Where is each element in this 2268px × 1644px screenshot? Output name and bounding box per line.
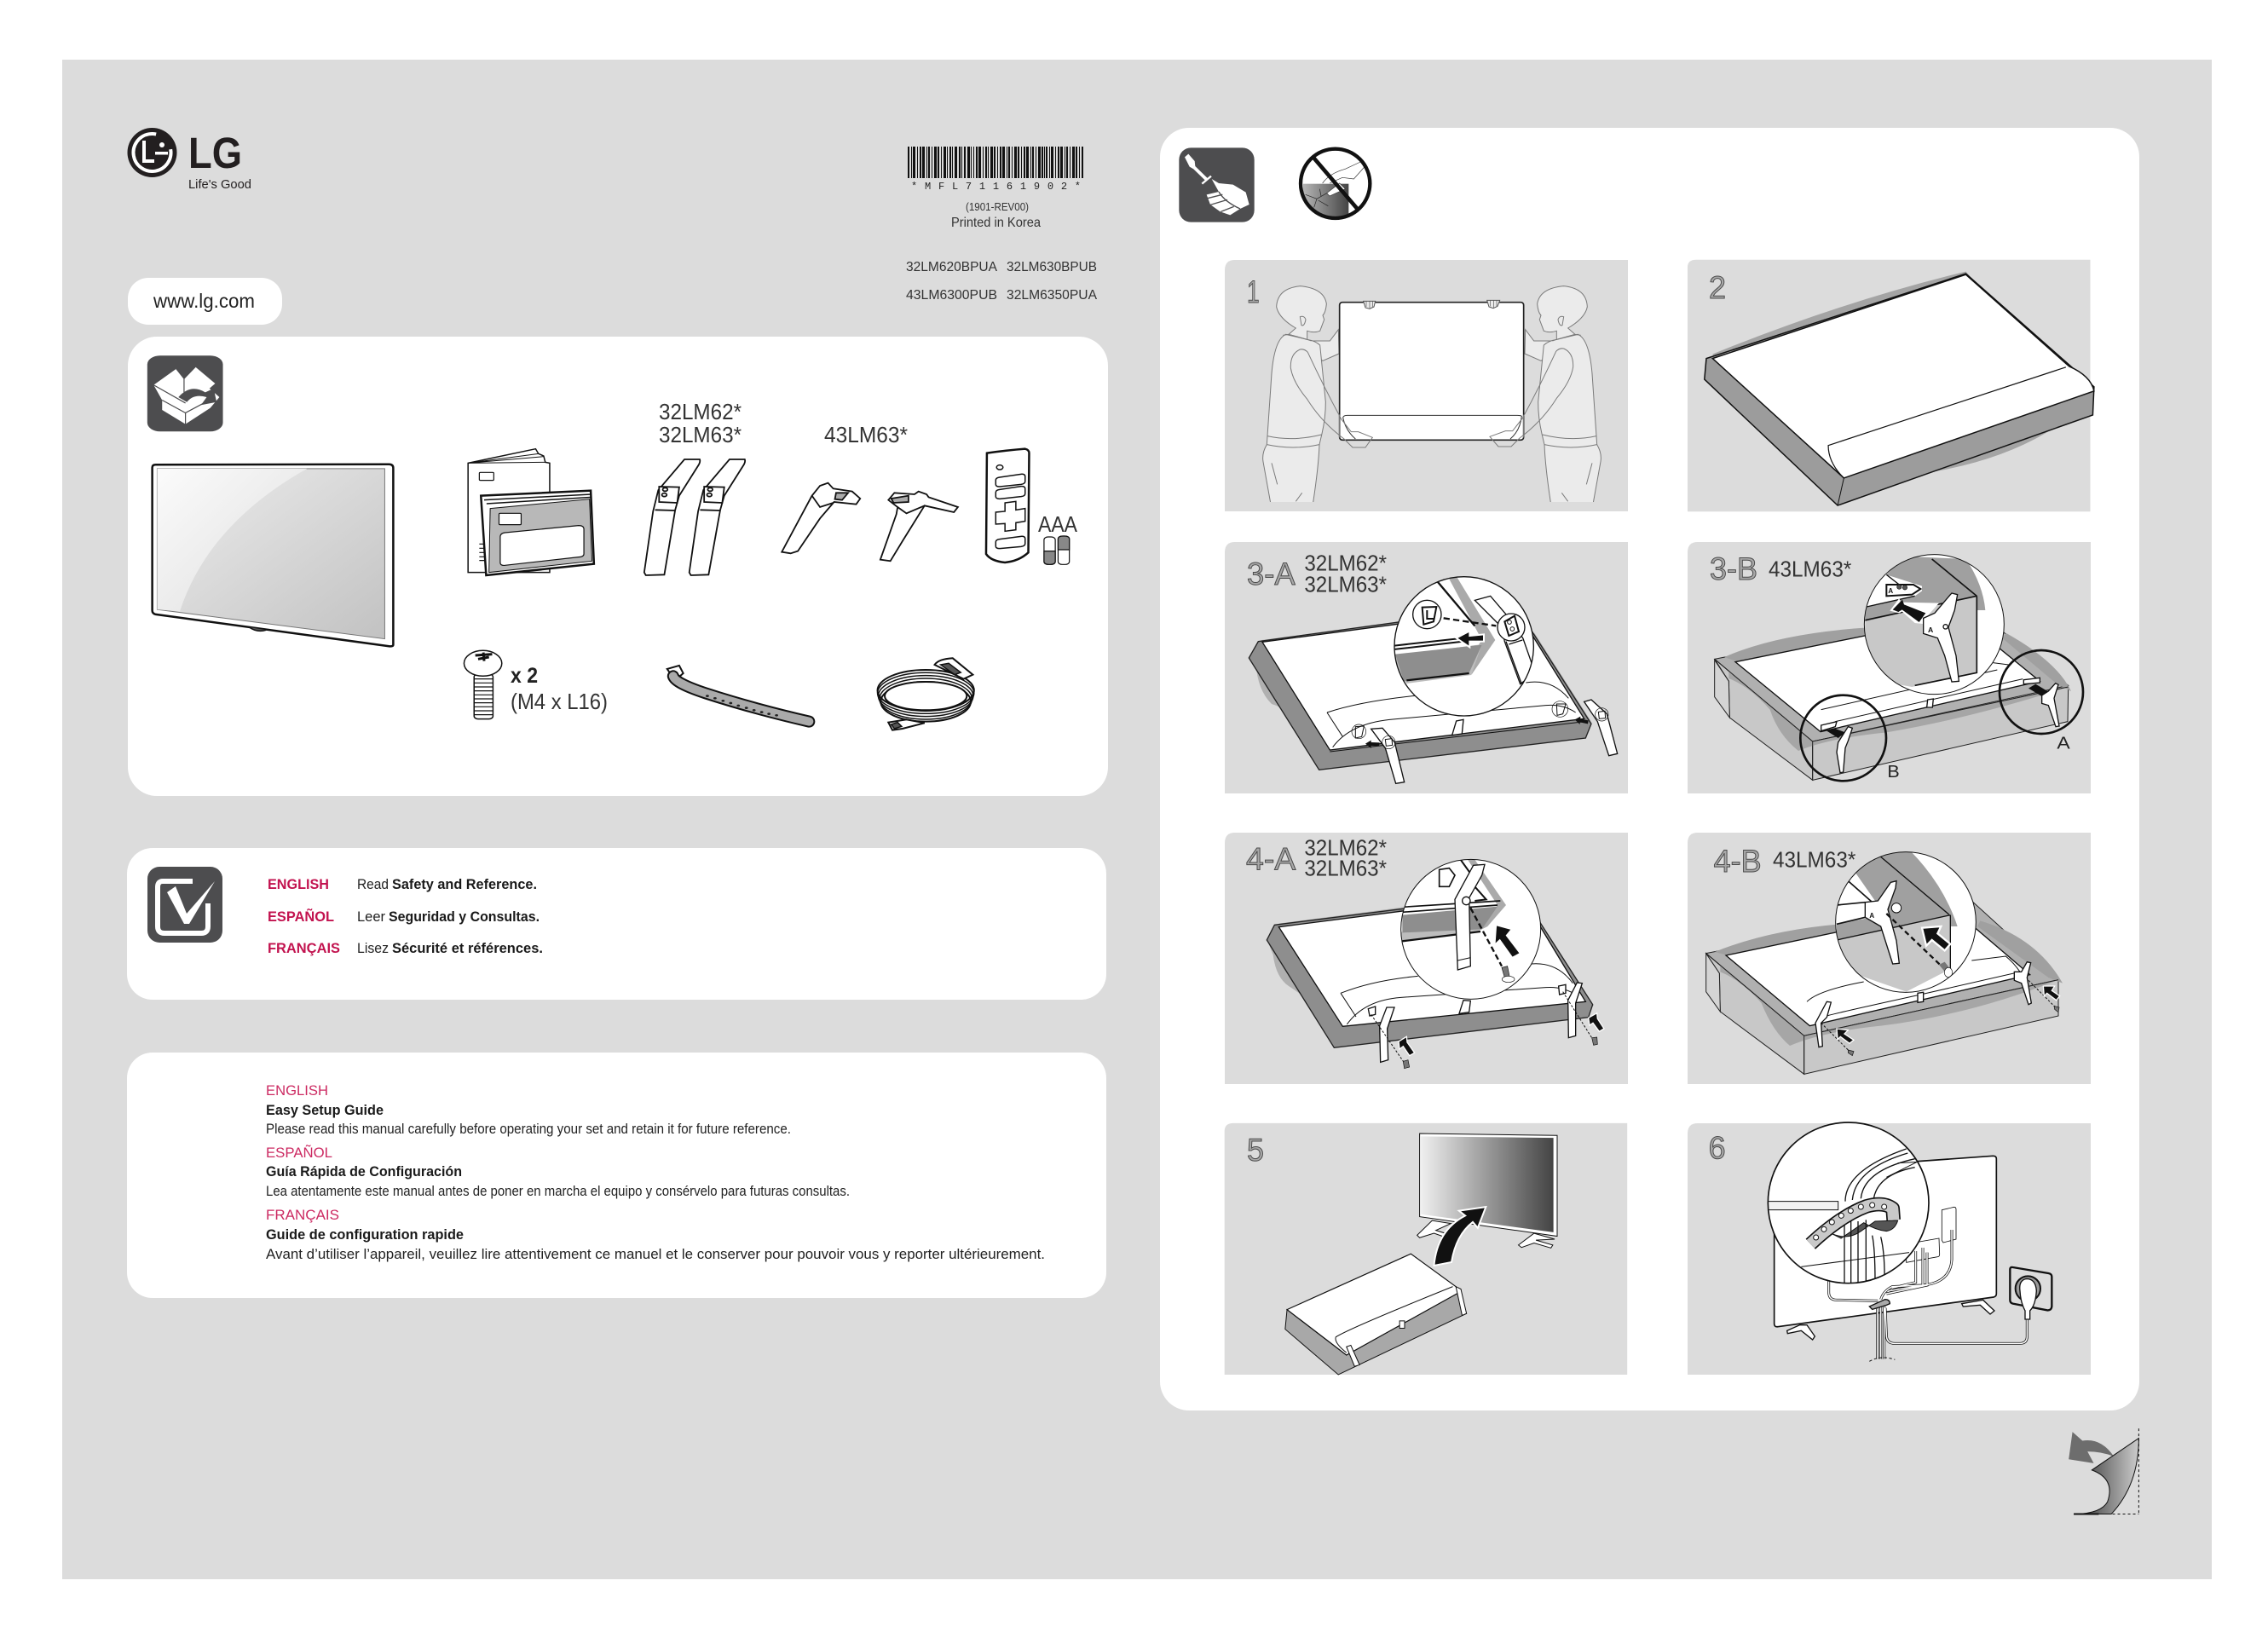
icon: checkmark xyxy=(147,867,222,943)
step label 4-B: 4-B xyxy=(1714,843,1762,879)
hands xyxy=(1290,300,1573,447)
illustration: stands 32 inch xyxy=(644,459,745,575)
small arrows xyxy=(1837,986,2060,1043)
TV back xyxy=(1726,908,2030,1026)
step number 2: 2 xyxy=(1709,270,1726,305)
icon: do not crack screen xyxy=(1301,149,1370,219)
panel: easy setup guide xyxy=(127,1053,1106,1298)
black circle A xyxy=(2000,650,2083,734)
panel: easy setup guide: Lea atentamente este manual antes de poner en marcha el equipo y consérvelo para futuras consultas. xyxy=(266,1183,850,1199)
detail circle: A xyxy=(1928,626,1934,634)
model list xyxy=(906,260,1097,303)
step number 1: 1 xyxy=(1247,274,1260,309)
small stands xyxy=(1815,962,2031,1047)
label: screw size: (M4 x L16) xyxy=(511,689,608,714)
label: stand models 43: 43LM63* xyxy=(824,422,908,447)
model label: 43LM63* xyxy=(1773,847,1855,873)
language lines: Read xyxy=(357,876,389,892)
website pill xyxy=(128,278,282,325)
shadows xyxy=(1724,627,2071,691)
illustration: cable tie xyxy=(667,666,809,722)
language lines: Safety and Reference. xyxy=(392,876,537,892)
accessories drawings xyxy=(464,449,1070,730)
language lines: Seguridad y Consultas. xyxy=(389,909,540,925)
cables xyxy=(1829,1230,2027,1361)
shadows xyxy=(1715,920,2063,984)
right person xyxy=(1525,286,1601,505)
callout letter A: A xyxy=(2057,735,2070,753)
model label: 43LM63* xyxy=(1769,557,1851,582)
panel: easy setup guide: Avant d’utiliser l’appareil, veuillez lire attentivement ce manuel et le conserver pour pouvoir vous y reporter ultérieurement. xyxy=(266,1246,1045,1262)
detail circle: A xyxy=(1869,912,1874,920)
illustration: remote control xyxy=(986,449,1029,562)
curved gray arrow xyxy=(2069,1432,2114,1463)
black circles xyxy=(1800,695,1886,781)
illustration: manuals xyxy=(468,449,594,575)
TV back xyxy=(1775,1156,1996,1327)
step 3-B panel xyxy=(1688,542,2091,793)
panel: assembly steps xyxy=(1160,128,2139,1410)
illustration: screw xyxy=(464,650,502,719)
TV back xyxy=(1735,616,2040,732)
icons: tool and warning xyxy=(1179,147,1370,222)
TV feet xyxy=(1787,1300,1994,1340)
language lines: Lisez xyxy=(357,940,389,956)
detail circle: A xyxy=(1888,587,1893,595)
language lines: Sécurité et références. xyxy=(392,940,543,956)
model list: 43LM6300PUB xyxy=(906,288,997,303)
step 4-B panel xyxy=(1688,833,2091,1084)
TV back xyxy=(1278,896,1585,1026)
label: AAA: AAA xyxy=(1038,511,1078,537)
step number 5: 5 xyxy=(1247,1133,1264,1168)
small fixtures xyxy=(1368,984,1566,1016)
small brackets xyxy=(1355,704,1606,746)
step 3-A panel xyxy=(1225,542,1628,793)
icon: open box xyxy=(147,355,223,431)
box xyxy=(1249,606,1591,770)
TV standing with gradient screen xyxy=(1417,1133,1557,1248)
model list: 32LM630BPUB xyxy=(1007,260,1097,274)
small stands xyxy=(1352,700,1618,783)
language lines: Leer xyxy=(357,909,385,925)
panel: box contents xyxy=(128,337,1108,796)
illustration: TV front xyxy=(153,464,393,646)
model label: 32LM62* xyxy=(1304,835,1387,861)
language lines: ESPAÑOL xyxy=(268,908,334,925)
box xyxy=(1267,894,1593,1047)
small arrows xyxy=(1365,717,1589,748)
center bracket xyxy=(1452,719,1463,735)
step label 4-A: 4-A xyxy=(1246,840,1296,876)
step label 3-B: 3-B xyxy=(1710,551,1757,586)
circle A stand xyxy=(2023,678,2059,727)
shadows xyxy=(1267,907,1594,1047)
callout letter B: B xyxy=(1887,763,1900,782)
header: LG logo xyxy=(128,128,251,192)
model label: 32LM63* xyxy=(1304,856,1387,881)
small arrows xyxy=(1399,1013,1604,1056)
panel: easy setup guide: ENGLISH xyxy=(266,1082,328,1099)
circle B stand xyxy=(1821,722,1852,773)
left person xyxy=(1263,286,1339,505)
model label: 32LM63* xyxy=(1304,571,1387,597)
language lines xyxy=(268,876,543,956)
panel: easy setup guide: Please read this manual carefully before operating your set and retain it for future reference. xyxy=(266,1121,791,1137)
box xyxy=(1705,274,2094,505)
barcode: * M F L 7 1 1 6 1 9 0 2 * xyxy=(911,181,1081,193)
step 4-A panel xyxy=(1225,833,1628,1084)
TV lying on box xyxy=(1285,1254,1467,1375)
TV back xyxy=(1262,609,1584,750)
model label: 32LM62* xyxy=(1304,550,1387,575)
step 1 panel xyxy=(1225,260,1628,511)
TV back xyxy=(1712,274,2094,478)
panel: easy setup guide: Guide de configuration rapide xyxy=(266,1226,464,1243)
detail circle xyxy=(1835,850,1976,992)
icon and TV xyxy=(147,355,393,646)
box xyxy=(1715,609,2069,741)
shadow xyxy=(1712,272,2092,480)
header: LG logo: Life's Good xyxy=(188,177,251,192)
center bracket xyxy=(1459,1001,1470,1013)
illustration: stands 43 inch xyxy=(782,483,958,561)
model list: 32LM620BPUA xyxy=(906,260,997,274)
header: LG logo: LG xyxy=(188,129,242,177)
illustration: power cable xyxy=(878,658,974,730)
illustration: batteries xyxy=(1044,536,1070,564)
model list: 32LM6350PUA xyxy=(1007,288,1097,303)
small dashed lines xyxy=(1371,992,1594,1064)
step 2 panel xyxy=(1688,260,2094,511)
wall socket and plug xyxy=(2010,1267,2052,1319)
detail circle xyxy=(1768,1122,1929,1283)
small stands xyxy=(1380,983,1582,1062)
box xyxy=(1706,901,2058,1035)
panel: easy setup guide: FRANÇAIS xyxy=(266,1207,339,1223)
detail circle xyxy=(1864,555,2004,695)
step 6 panel xyxy=(1688,1122,2091,1375)
label: stand models 32 second line: 32LM63* xyxy=(659,422,742,447)
panel: easy setup guide: ESPAÑOL xyxy=(266,1145,332,1161)
small screws xyxy=(1403,1037,1597,1069)
label: screw quantity: x 2 xyxy=(511,664,538,688)
curved arrow xyxy=(1434,1207,1486,1266)
label: stand models 32: 32LM62* xyxy=(659,399,742,424)
language lines: FRANÇAIS xyxy=(268,940,340,956)
TV held upright xyxy=(1340,303,1524,440)
icon: screwdriver in hand xyxy=(1179,147,1255,222)
small tie xyxy=(1869,1300,1890,1309)
language lines: ENGLISH xyxy=(268,876,329,892)
revision code: (1901-REV00) xyxy=(966,200,1029,213)
panel: read safety xyxy=(127,848,1106,1000)
shadows xyxy=(1250,622,1593,770)
panel: easy setup guide: Guía Rápida de Configuración xyxy=(266,1163,462,1180)
folded corner xyxy=(2076,1439,2138,1514)
panel: easy setup guide: Easy Setup Guide xyxy=(266,1102,384,1118)
detail circle xyxy=(1394,576,1535,716)
step number 6: 6 xyxy=(1709,1130,1726,1166)
step label 3-A: 3-A xyxy=(1247,556,1296,591)
detail circle xyxy=(1401,859,1541,999)
terminal panels xyxy=(1907,1207,1956,1262)
page turn icon xyxy=(2069,1428,2138,1514)
step 5 panel xyxy=(1225,1123,1627,1375)
small dashed lines xyxy=(1821,980,2058,1054)
website pill: www.lg.com xyxy=(153,290,255,312)
small screws xyxy=(1848,1006,2059,1056)
printed in Korea: Printed in Korea xyxy=(951,216,1041,230)
